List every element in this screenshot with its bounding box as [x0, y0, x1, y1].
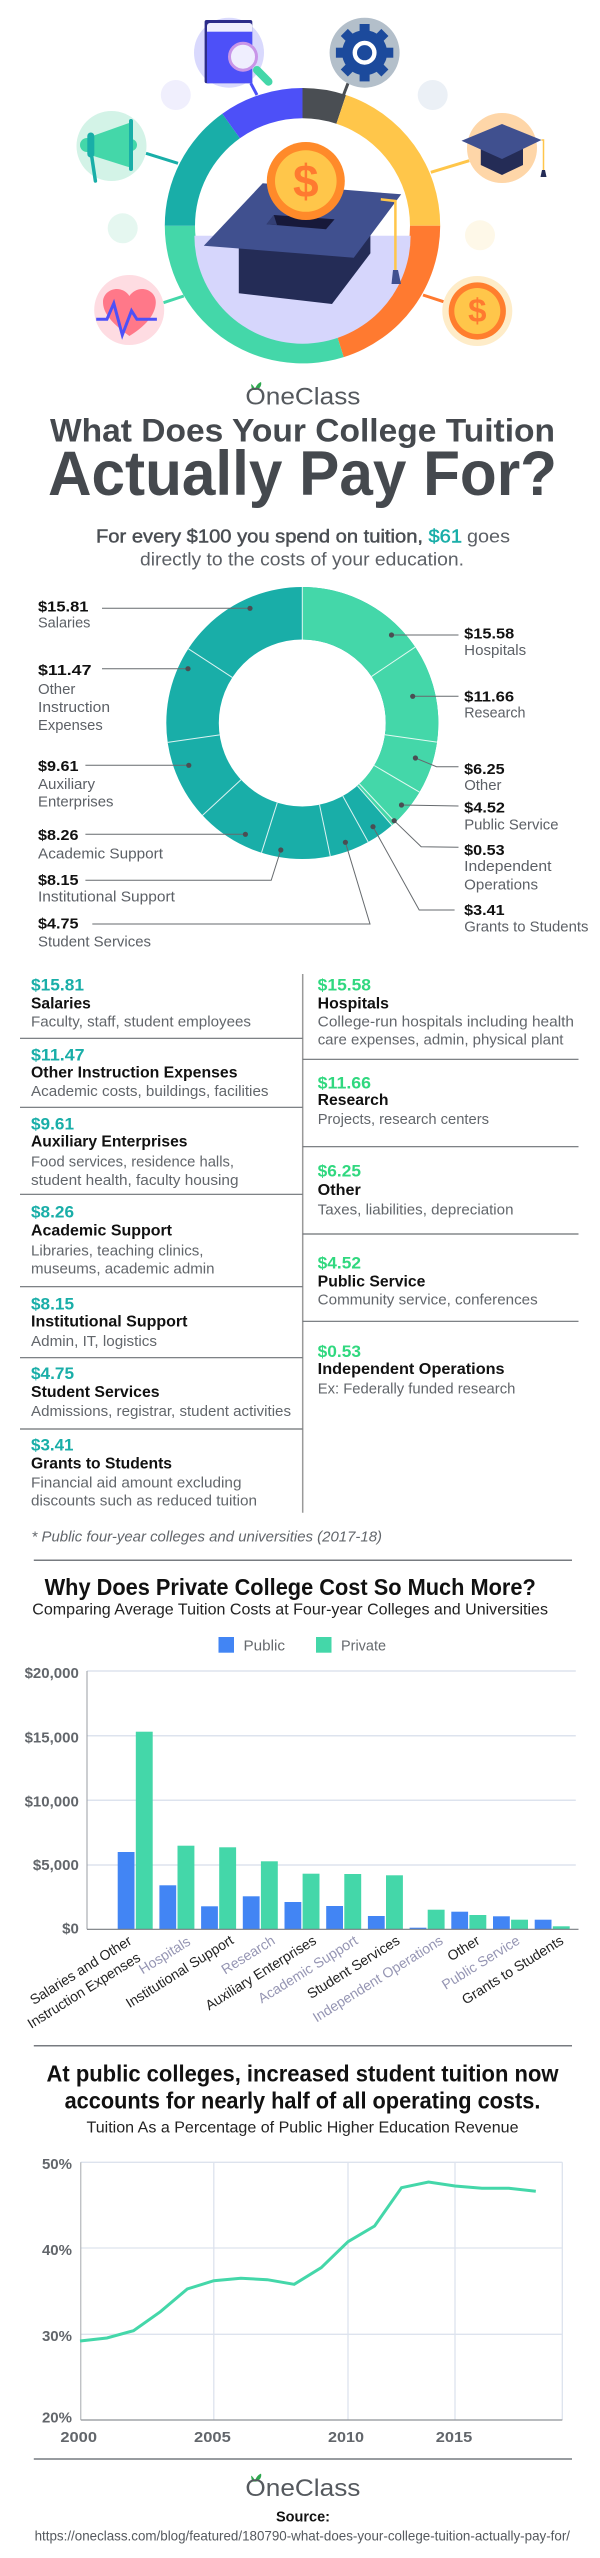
- left column definitions: student health, faculty housing: [31, 1172, 238, 1189]
- right column definitions: Public Service: [318, 1274, 426, 1291]
- right column definitions: Hospitals: [318, 995, 389, 1012]
- donut labels: left: $8.15: [38, 872, 78, 889]
- icon: heart with pulse: [94, 275, 164, 345]
- left column definitions: Academic Support: [31, 1222, 172, 1239]
- donut labels: right: Operations: [464, 876, 538, 893]
- donut labels: right: $4.52: [464, 800, 505, 817]
- heading: private college cost: Comparing Average Tuition Costs at Four-year Colleges and Universities: [32, 1601, 548, 1618]
- right column definitions: College-run hospitals including health: [318, 1014, 574, 1031]
- bar chart: public vs private costs: $5,000: [33, 1857, 79, 1874]
- right column definitions: care expenses, admin, physical plant: [318, 1032, 564, 1049]
- source: [35, 2509, 570, 2544]
- bar chart: public vs private costs: $20,000: [25, 1665, 79, 1682]
- donut labels: left: $15.81: [38, 599, 88, 616]
- right column definitions: Taxes, liabilities, depreciation: [318, 1202, 514, 1219]
- line chart: tuition share of revenue: 40%: [42, 2242, 72, 2259]
- icon: graduation cap piggy bank with coin: [204, 142, 401, 304]
- left column definitions: $3.41: [31, 1436, 74, 1455]
- right column definitions: [318, 976, 574, 1397]
- left column definitions: discounts such as reduced tuition: [31, 1492, 257, 1509]
- right column definitions: $4.52: [318, 1254, 361, 1273]
- hero illustration: [76, 18, 546, 363]
- legend: Private: [341, 1638, 386, 1655]
- donut labels: left: Enterprises: [38, 794, 114, 811]
- left column definitions: $9.61: [31, 1114, 74, 1133]
- left column definitions: Other Instruction Expenses: [31, 1064, 237, 1081]
- right column definitions: Community service, conferences: [318, 1291, 538, 1308]
- line chart: tuition share of revenue: 2010: [328, 2429, 364, 2446]
- legend: Public: [244, 1638, 286, 1655]
- donut labels: right: Independent: [464, 858, 552, 875]
- icon: graduation cap piggy bank with coin: $: [293, 155, 319, 207]
- left column definitions: Admin, IT, logistics: [31, 1333, 157, 1350]
- donut labels: left: Other: [38, 681, 75, 698]
- right column definitions: Independent Operations: [318, 1361, 505, 1378]
- heading: private college cost: [32, 1574, 548, 1618]
- donut labels: left: Student Services: [38, 934, 151, 951]
- right column definitions: Ex: Federally funded research: [318, 1380, 515, 1397]
- icon: dollar coin: $: [468, 292, 486, 329]
- legend: [218, 1637, 386, 1655]
- left column definitions: Libraries, teaching clinics,: [31, 1243, 203, 1260]
- bar chart: public vs private costs: $15,000: [25, 1729, 79, 1746]
- heading: public college tuition share: accounts for nearly half of all operating costs.: [65, 2087, 540, 2113]
- donut labels: left: [38, 599, 176, 951]
- left column definitions: Salaries: [31, 995, 91, 1012]
- right column definitions: $6.25: [318, 1162, 361, 1181]
- donut labels: left: Instruction: [38, 699, 110, 716]
- left column definitions: Grants to Students: [31, 1456, 172, 1473]
- bar chart: public vs private costs: Research: [218, 1932, 278, 1977]
- right column definitions: Projects, research centers: [318, 1111, 489, 1128]
- source: Source:: [276, 2509, 330, 2526]
- bar chart: public vs private costs: Academic Support: [255, 1932, 360, 2006]
- bar chart: public vs private costs: Public Service: [439, 1932, 523, 1993]
- left column definitions: Food services, residence halls,: [31, 1154, 234, 1171]
- bar chart: public vs private costs: Other: [444, 1932, 483, 1964]
- intro text: [96, 526, 510, 570]
- left column definitions: Admissions, registrar, student activities: [31, 1403, 291, 1420]
- intro text: directly to the costs of your education.: [140, 549, 464, 570]
- donut ring: [165, 88, 440, 363]
- donut labels: right: Other: [464, 777, 502, 794]
- intro text: $61: [428, 526, 462, 547]
- bar chart: public vs private costs: Hospitals: [136, 1933, 193, 1977]
- left column definitions: $15.81: [31, 976, 84, 995]
- panel: expense definitions table: [20, 974, 578, 1513]
- left column definitions: Faculty, staff, student employees: [31, 1014, 251, 1031]
- left column definitions: museums, academic admin: [31, 1261, 214, 1278]
- right column definitions: Research: [318, 1092, 388, 1109]
- line chart: tuition share of revenue: 30%: [42, 2328, 72, 2345]
- right column definitions: $11.66: [318, 1073, 371, 1092]
- bar chart: public vs private costs: $0: [62, 1920, 79, 1937]
- bar chart: public vs private costs: $10,000: [25, 1794, 79, 1811]
- bar chart: public vs private costs: Independent Operations: [310, 1932, 446, 2025]
- donut labels: right: $15.58: [464, 625, 514, 642]
- donut labels: left: $8.26: [38, 827, 78, 844]
- donut labels: left: Auxiliary: [38, 776, 95, 793]
- line chart: tuition share of revenue: 50%: [42, 2156, 72, 2173]
- donut labels: right: [464, 625, 588, 936]
- donut labels: left: $11.47: [38, 662, 92, 679]
- bar chart: public vs private costs: Salaries and Other: [27, 1932, 135, 2008]
- left column definitions: $4.75: [31, 1364, 74, 1383]
- heading: public college tuition share: [46, 2061, 559, 2137]
- donut labels: right: Research: [464, 704, 526, 721]
- bar chart: public vs private costs: Instruction Expenses: [24, 1949, 143, 2031]
- icon: graduation cap: [462, 113, 546, 183]
- line chart: tuition share of revenue: [42, 2156, 562, 2446]
- icon: book with magnifier: [194, 18, 268, 88]
- left column definitions: Auxiliary Enterprises: [31, 1134, 188, 1151]
- right column definitions: $15.58: [318, 976, 371, 995]
- intro text: goes: [467, 526, 510, 547]
- bar chart: public vs private costs: Auxiliary Enterprises: [202, 1932, 319, 2013]
- icon: gear: [330, 18, 400, 88]
- bar chart: public vs private costs: Institutional Support: [123, 1932, 236, 2011]
- line chart: tuition share of revenue: 2015: [436, 2429, 472, 2446]
- left column definitions: $11.47: [31, 1046, 85, 1065]
- heading: public college tuition share: At public colleges, increased student tuition now: [46, 2061, 559, 2087]
- right column definitions: $0.53: [318, 1342, 361, 1361]
- intro text: For every $100 you spend on tuition,: [96, 526, 423, 547]
- footnote: * Public four-year colleges and universities (2017-18): [32, 1529, 382, 1546]
- donut labels: right: Hospitals: [464, 642, 526, 659]
- logo: OneClass: OneClass: [245, 383, 360, 410]
- donut labels: left: $4.75: [38, 915, 78, 932]
- source: https://oneclass.com/blog/featured/180790-what-does-your-college-tuition-actually-pay-for/: [35, 2528, 570, 2544]
- donut labels: left: Salaries: [38, 615, 90, 632]
- logo: OneClass footer: OneClass: [245, 2475, 360, 2502]
- left column definitions: $8.15: [31, 1294, 74, 1313]
- donut labels: right: $3.41: [464, 902, 505, 919]
- left column definitions: [31, 976, 291, 1509]
- left column definitions: Institutional Support: [31, 1314, 187, 1331]
- donut labels: right: $6.25: [464, 761, 505, 778]
- left column definitions: $8.26: [31, 1202, 74, 1221]
- donut labels: left: Expenses: [38, 717, 103, 734]
- left column definitions: Academic costs, buildings, facilities: [31, 1083, 268, 1100]
- bar chart: public vs private costs: [24, 1665, 579, 2031]
- line chart: tuition share of revenue: 2000: [60, 2429, 97, 2446]
- heading: private college cost: Why Does Private College Cost So Much More?: [45, 1574, 536, 1600]
- bar chart: public vs private costs: Grants to Students: [459, 1932, 566, 2007]
- donut labels: right: $11.66: [464, 688, 514, 705]
- right column definitions: Other: [318, 1182, 361, 1199]
- line chart: tuition share of revenue: 20%: [42, 2410, 72, 2427]
- donut labels: left: Academic Support: [38, 845, 164, 862]
- title: Actually Pay For?: [48, 439, 557, 509]
- donut chart: where $100 of tuition goes: [85, 587, 459, 924]
- title: What Does Your College Tuition: [50, 413, 555, 449]
- donut labels: right: Grants to Students: [464, 919, 588, 936]
- donut labels: right: $0.53: [464, 842, 505, 859]
- bar chart: public vs private costs: Student Services: [304, 1932, 402, 2002]
- line chart: tuition share of revenue: 2005: [194, 2429, 231, 2446]
- icon: megaphone: [76, 111, 146, 181]
- donut labels: left: Institutional Support: [38, 889, 176, 906]
- heading: public college tuition share: Tuition As a Percentage of Public Higher Education Revenue: [86, 2120, 519, 2137]
- left column definitions: Student Services: [31, 1384, 160, 1401]
- left column definitions: Financial aid amount excluding: [31, 1474, 242, 1491]
- donut labels: left: $9.61: [38, 758, 78, 775]
- donut labels: right: Public Service: [464, 816, 558, 833]
- icon: dollar coin: [442, 276, 512, 346]
